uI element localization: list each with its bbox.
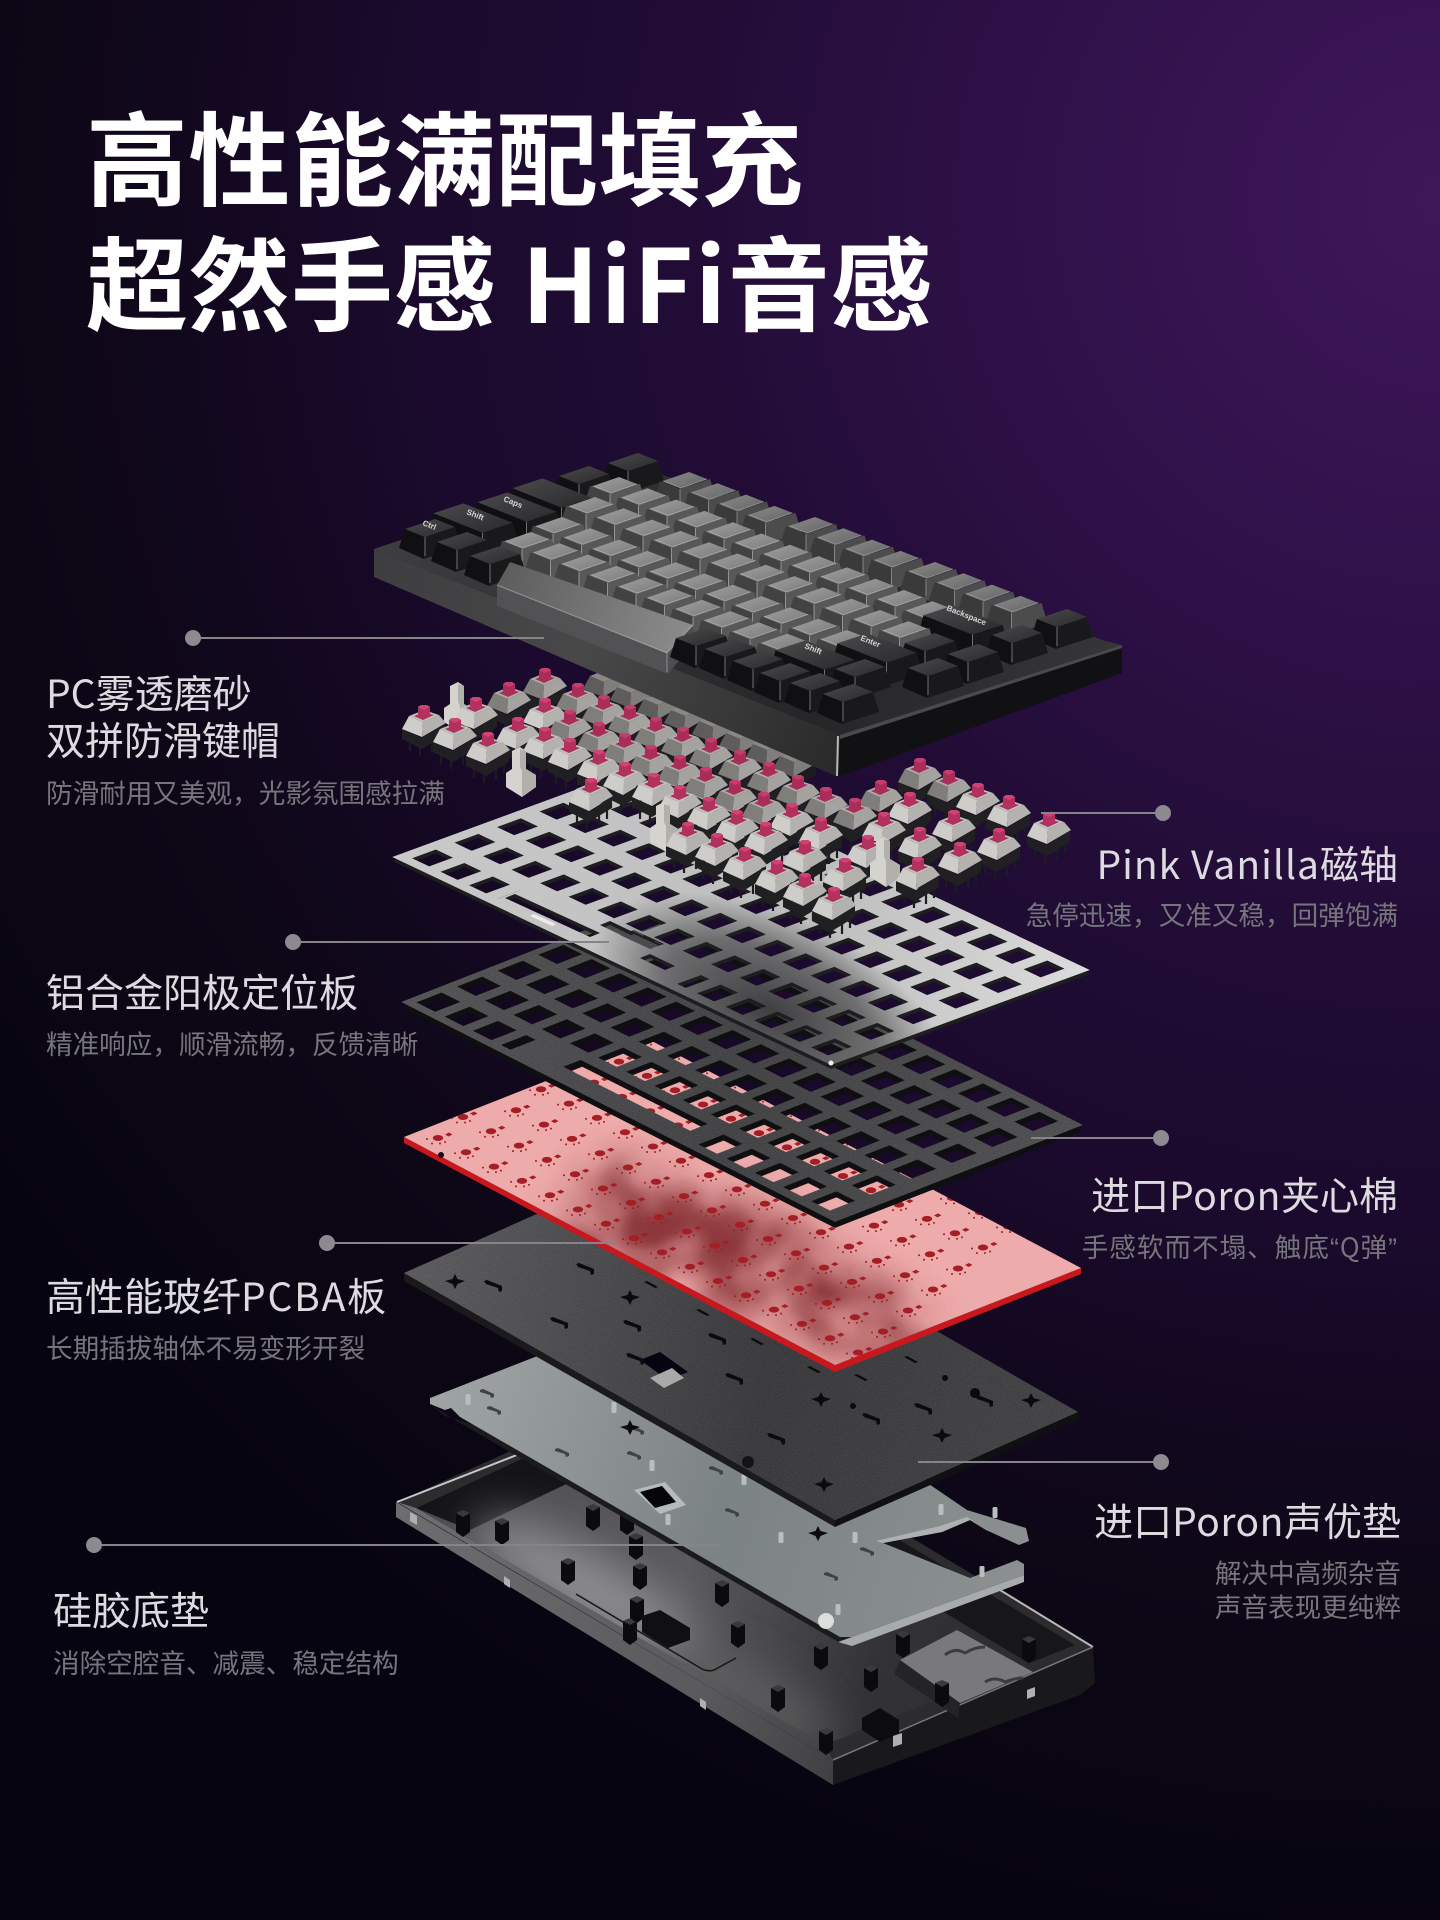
label: keycaps description: 防滑耐用又美观，光影氛围感拉满 bbox=[46, 772, 445, 811]
case mounting posts bbox=[456, 1504, 1036, 1755]
leader: Poron foam bbox=[1031, 1130, 1169, 1146]
title: 高性能满配填充 bbox=[86, 81, 804, 228]
keycap legends bbox=[421, 494, 988, 657]
foam hole clusters bbox=[426, 1044, 1011, 1358]
layer: bottom case bbox=[396, 1385, 1095, 1785]
title: 超然手感 HiFi音感 bbox=[86, 206, 933, 353]
label: Poron foam heading: 进口Poron夹心棉 bbox=[1091, 1166, 1398, 1222]
label: PCBA description: 长期插拔轴体不易变形开裂 bbox=[46, 1327, 365, 1366]
layer: dark foam frame bbox=[401, 905, 1083, 1228]
bottom row keycaps bbox=[399, 519, 879, 724]
label: Poron pad description: 解决中高频杂音 bbox=[1215, 1552, 1401, 1591]
function row keycaps bbox=[602, 453, 1093, 649]
keycap legends: Caps bbox=[502, 494, 524, 510]
label: plate description: 精准响应，顺滑流畅，反馈清晰 bbox=[46, 1023, 418, 1062]
shift row keycaps bbox=[428, 503, 891, 699]
layer: anodized aluminum plate bbox=[392, 762, 1090, 1069]
keycap legends: Shift bbox=[803, 641, 823, 657]
label: Poron foam description: 手感软而不塌、触底“Q弹” bbox=[1082, 1226, 1398, 1265]
label: switches description: 急停迅速，又准又稳，回弹饱满 bbox=[1026, 894, 1398, 933]
leader: silicone pad bbox=[86, 1537, 719, 1553]
exploded keyboard illustration bbox=[86, 453, 1171, 1785]
layer: Pink Vanilla switches bbox=[402, 668, 1071, 938]
title bbox=[86, 81, 933, 353]
leader: switches bbox=[1041, 805, 1171, 821]
battery mount bbox=[894, 1630, 1033, 1718]
leader: Poron pad bbox=[918, 1454, 1169, 1470]
keycap legends: Ctrl bbox=[421, 518, 437, 532]
keycap legends: Enter bbox=[859, 633, 882, 649]
leader: aluminum plate bbox=[285, 934, 609, 950]
label: keycaps heading bbox=[46, 664, 280, 767]
layer: PCBA board bbox=[404, 1165, 1078, 1527]
label: keycaps heading: 双拼防滑键帽 bbox=[46, 711, 280, 767]
keycap legends: Backspace bbox=[945, 603, 988, 628]
keycap legends: Shift bbox=[465, 507, 485, 523]
number row keycaps bbox=[553, 466, 1048, 665]
label: PCBA heading: 高性能玻纤PCBA板 bbox=[46, 1267, 386, 1323]
PCBA cut-out marks bbox=[445, 1263, 1041, 1492]
layer: assembled keyboard with keycaps bbox=[374, 453, 1122, 777]
label: silicone pad description: 消除空腔音、减震、稳定结构 bbox=[53, 1642, 399, 1681]
home row keycaps bbox=[472, 492, 964, 698]
label: Poron pad description: 声音表现更纯粹 bbox=[1215, 1586, 1401, 1625]
label: silicone pad heading: 硅胶底垫 bbox=[53, 1581, 209, 1637]
label: keycaps heading: PC雾透磨砂 bbox=[46, 664, 252, 720]
label: Poron pad heading: 进口Poron声优垫 bbox=[1094, 1492, 1401, 1548]
QWERTY row keycaps bbox=[507, 478, 1004, 684]
layer: red Poron sandwich foam bbox=[404, 1042, 1081, 1372]
leader: keycaps bbox=[185, 630, 544, 646]
label: Poron pad description bbox=[1215, 1552, 1401, 1625]
label: switches heading: Pink Vanilla磁轴 bbox=[1096, 835, 1398, 891]
leader: PCBA bbox=[319, 1235, 616, 1251]
layer: Poron pad (metal grey) bbox=[430, 1355, 1029, 1646]
label: plate heading: 铝合金阳极定位板 bbox=[46, 963, 358, 1019]
